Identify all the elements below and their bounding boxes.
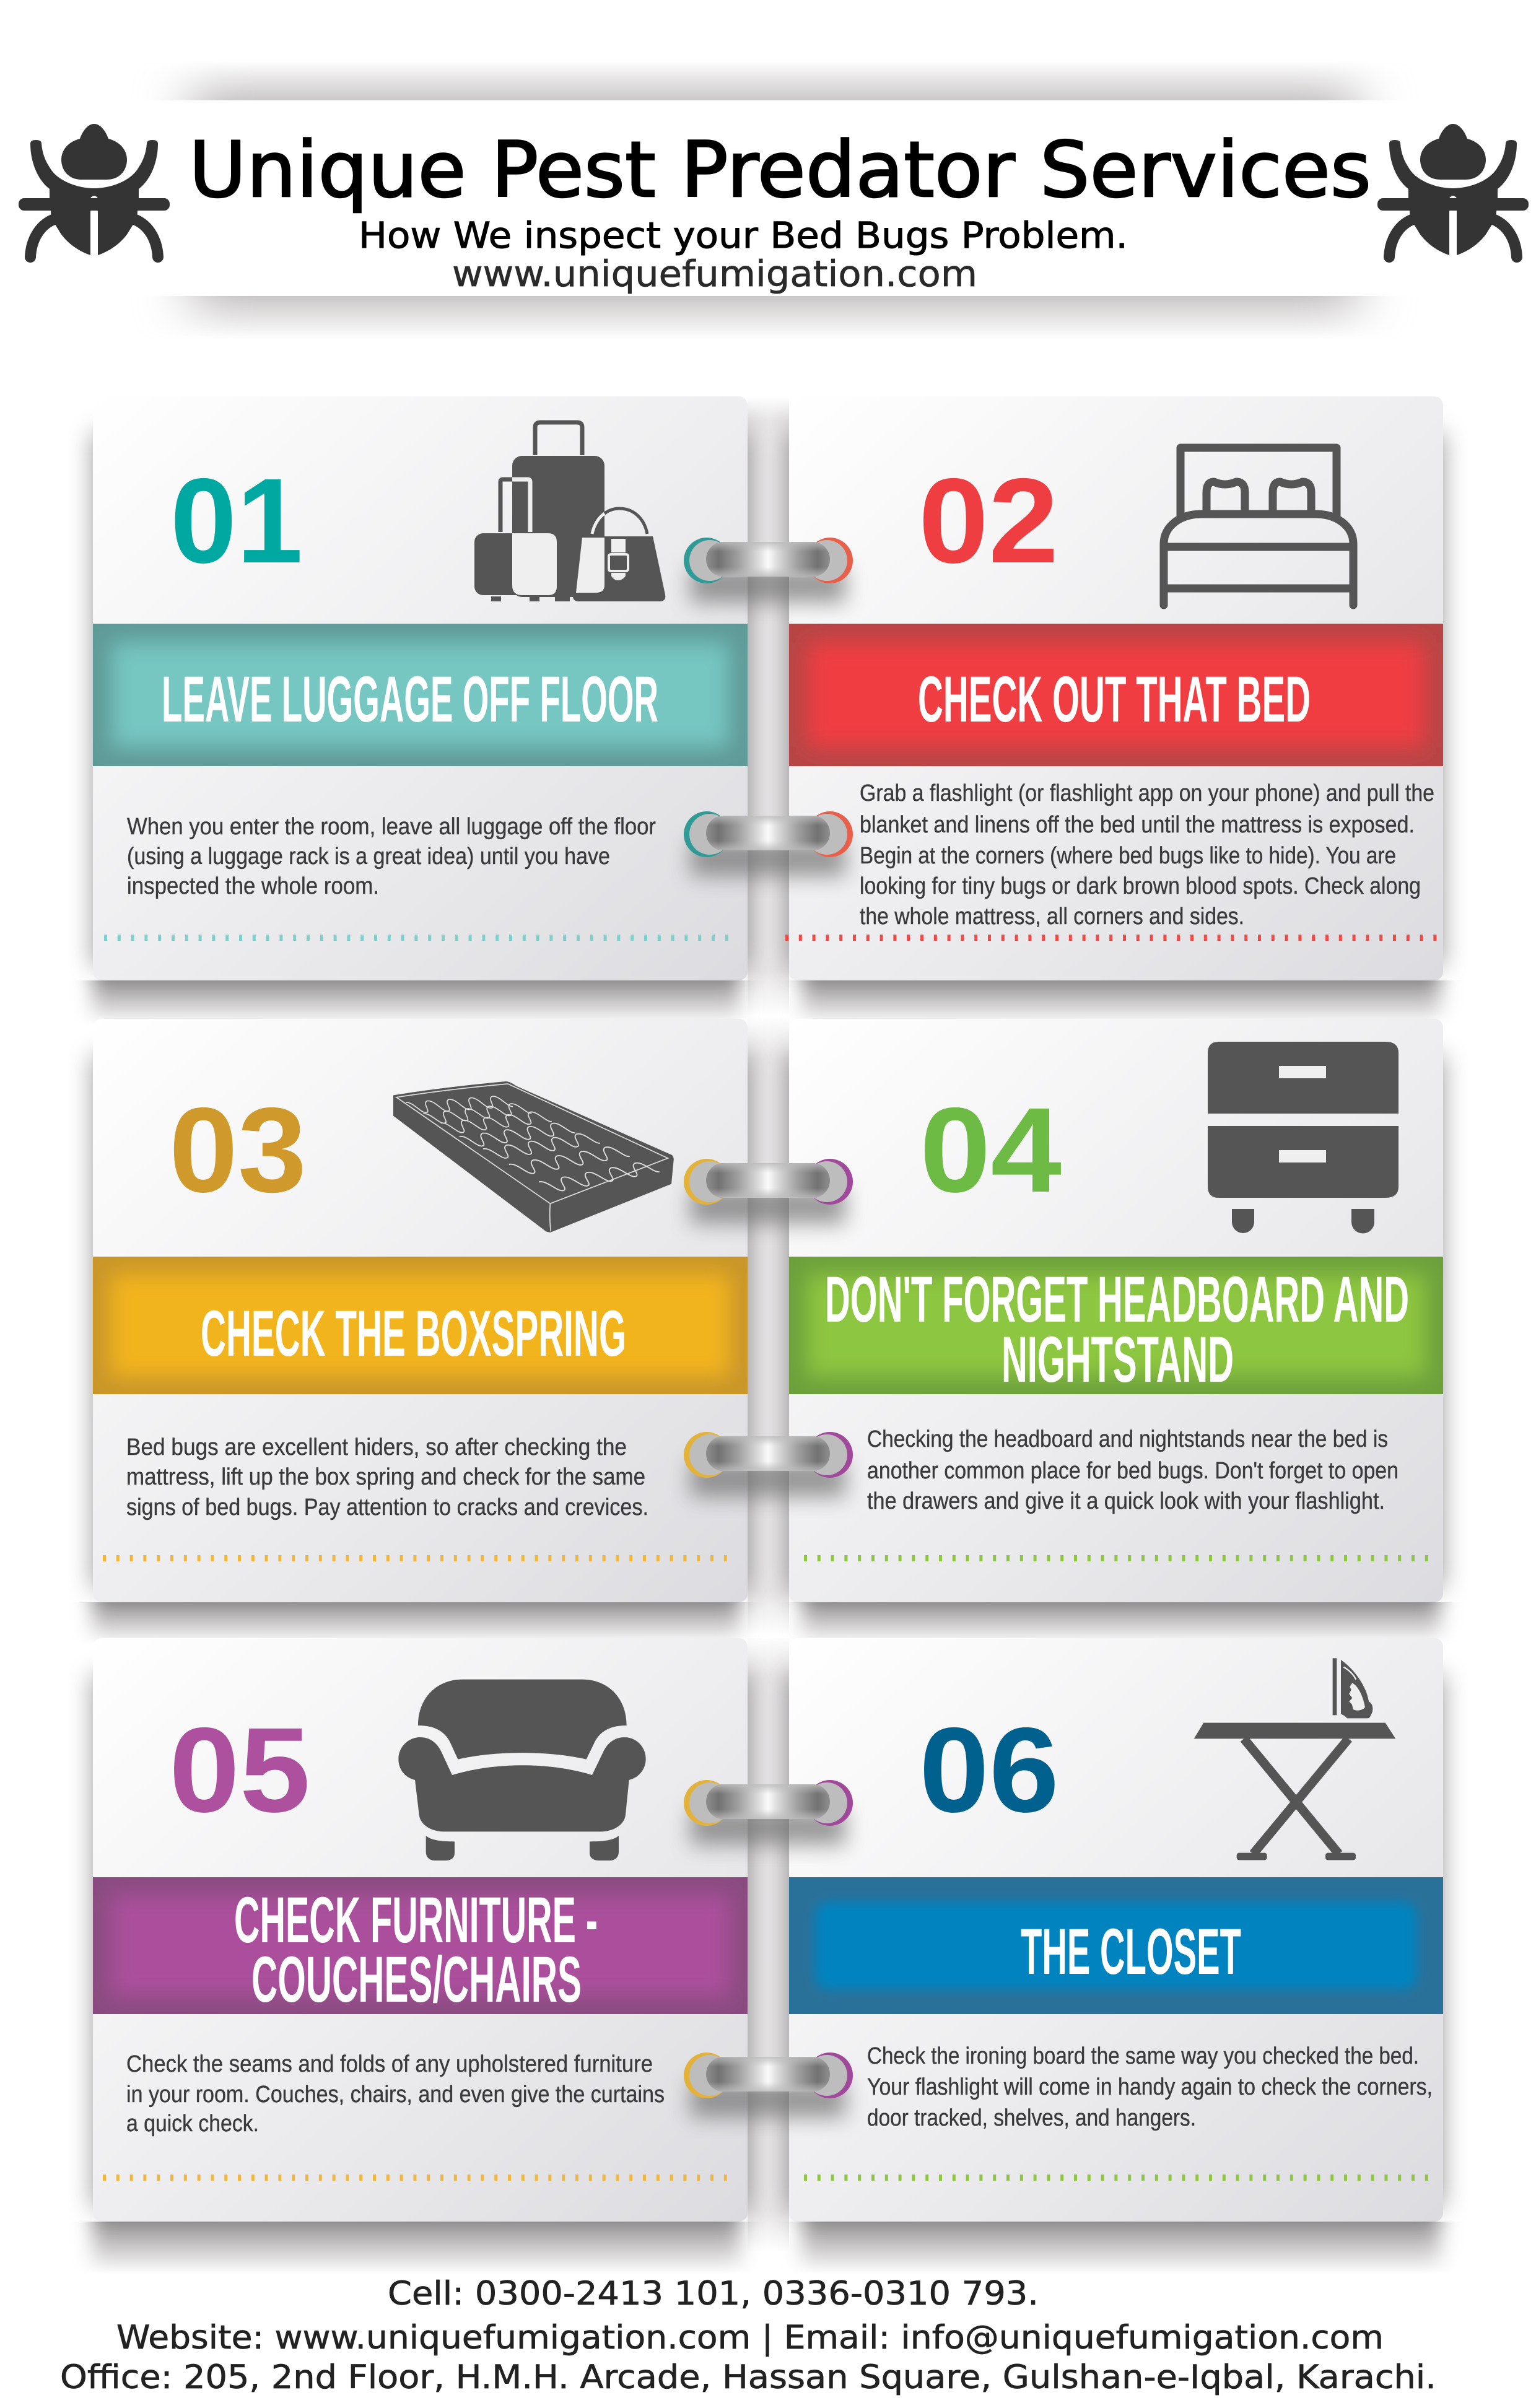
body text 02 [860,780,1434,930]
footer contact details: Cell: 0300-2413 101, 0336-0310 793. [388,2275,1039,2313]
body text 05 [126,2051,665,2137]
body text 02: Begin at the corners (where bed bugs like to hide). You are [860,843,1396,869]
heading band 06: THE CLOSET [1021,1916,1241,1988]
body text 01: inspected the whole room. [127,873,379,899]
title: Unique Pest Predator Services [189,126,1371,215]
body text 02: the whole mattress, all corners and sides. [860,904,1244,930]
footer contact details: Office: 205, 2nd Floor, H.M.H. Arcade, Hassan Square, Gulshan-e-Iqbal, Karachi. [60,2358,1436,2396]
body text 01 [127,814,656,899]
number 01: 01 [170,453,303,588]
body text 04: the drawers and give it a quick look with your flashlight. [867,1488,1385,1514]
icon: bed [1164,448,1353,605]
body text 06: Your flashlight will come in handy again to check the corners, [867,2074,1433,2100]
binder ring row 3 top [684,1780,853,1845]
icon: right bug [1377,124,1529,257]
body text 03: Bed bugs are excellent hiders, so after checking the [126,1434,627,1460]
body text 03: signs of bed bugs. Pay attention to cracks and crevices. [126,1494,648,1520]
body text 05: in your room. Couches, chairs, and even give the curtains [126,2082,665,2108]
binder ring row 1 top [684,538,853,603]
footer contact details [60,2275,1436,2396]
panel: step 01 [93,396,748,980]
body text 02: blanket and linens off the bed until the mattress is exposed. [860,812,1415,838]
footer contact details: Website: www.uniquefumigation.com | Email: info@uniquefumigation.com [116,2319,1384,2357]
heading band 03 [93,1257,748,1394]
heading band 06 [789,1877,1443,2014]
body text 06: Check the ironing board the same way you checked the bed. [867,2043,1419,2069]
body text 06 [867,2043,1433,2131]
heading band 04 [789,1257,1443,1396]
body text 04: Checking the headboard and nightstands near the bed is [867,1426,1388,1452]
panel: step 03 [93,1019,748,1602]
panel: step 05 [93,1638,748,2222]
body text 02: looking for tiny bugs or dark brown blood spots. Check along [860,873,1421,899]
body text 04: another common place for bed bugs. Don't forget to open [867,1458,1399,1484]
number 03: 03 [169,1083,307,1218]
body text 01: When you enter the room, leave all luggage off the floor [127,814,656,840]
body text 02: Grab a flashlight (or flashlight app on your phone) and pull the [860,780,1434,806]
icon: left bug [19,124,170,257]
number 04: 04 [920,1083,1062,1218]
binder ring row 3 bottom [684,2052,853,2118]
icon: nightstand [1208,1042,1399,1234]
body text 03 [126,1434,648,1520]
panel: step 06 [789,1638,1443,2222]
heading band 05: COUCHES/CHAIRS [251,1943,582,2016]
heading band 02 [789,624,1443,766]
body text 05: a quick check. [126,2111,259,2137]
panel: step 02 [785,396,1443,980]
icon: ironing board [1194,1658,1395,1860]
body text 05: Check the seams and folds of any upholstered furniture [126,2051,653,2077]
binder spines and card shadows [93,396,1443,2274]
heading band 05: CHECK FURNITURE - [234,1884,598,1956]
binder ring row 2 bottom [684,1432,853,1497]
body text 04 [867,1426,1399,1514]
icon: luggage [474,422,665,601]
body text 01: (using a luggage rack is a great idea) until you have [127,844,610,870]
binder ring row 2 top [684,1159,853,1224]
number 02: 02 [919,453,1058,588]
icon: sofa [398,1680,646,1861]
body text 03: mattress, lift up the box spring and check for the same [126,1464,645,1490]
number 06: 06 [919,1703,1059,1838]
body text 06: door tracked, shelves, and hangers. [867,2105,1196,2131]
heading band 05 [93,1877,748,2016]
heading band 03: CHECK THE BOXSPRING [201,1298,626,1370]
panel: step 04 [789,1019,1443,1602]
heading band 04: NIGHTSTAND [1001,1324,1234,1396]
heading band 01: LEAVE LUGGAGE OFF FLOOR [162,663,658,736]
website url: www.uniquefumigation.com [452,253,977,295]
binder ring row 1 bottom [684,811,853,876]
heading band 01 [93,624,748,766]
subtitle: How We inspect your Bed Bugs Problem. [359,214,1128,256]
number 05: 05 [169,1703,310,1838]
header shadows [192,61,1356,339]
icon: mattress [393,1081,674,1232]
